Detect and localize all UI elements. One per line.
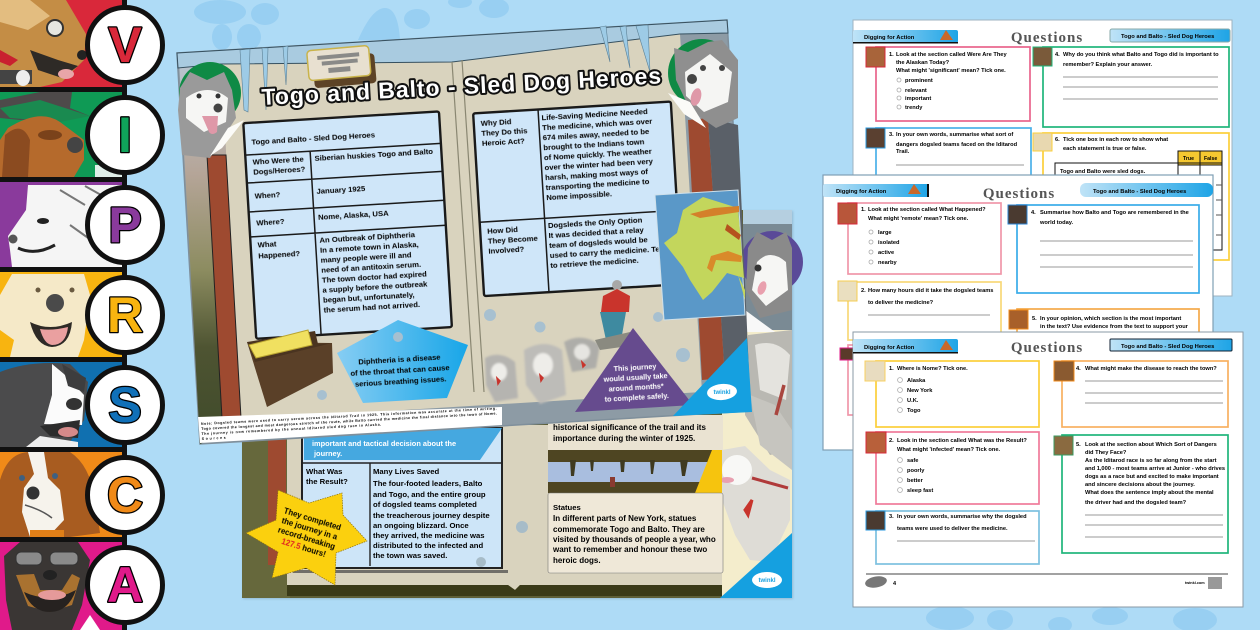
snowflakes [317, 309, 690, 400]
question box 1 pink: relevant [905, 88, 927, 94]
footer: twinkl.com [1185, 581, 1205, 585]
statues text panel: commemorate Togo and Balto. They are [553, 525, 705, 534]
panel: worksheet page C [853, 332, 1243, 607]
right fact table: over the winter had been very [544, 157, 654, 172]
table text: Many Lives Saved [373, 467, 440, 476]
question box 1 yellow [865, 361, 1039, 427]
right fact table: Dogsleds the Only Option [548, 215, 643, 230]
statues text panel: heroic dogs. [553, 556, 601, 565]
callout: yellow star: the journey in a [281, 516, 339, 542]
header tab left [853, 339, 958, 354]
question box blue: In your own words, summarise what sort of [896, 132, 1013, 138]
trail text panel [548, 415, 723, 450]
right fact table: They Become [488, 234, 539, 246]
row A: pink with rottweiler in glasses [0, 542, 122, 630]
panel: back book page [242, 210, 803, 599]
question box yellow with true/false table: False [1204, 156, 1217, 162]
question box blue: dangers dogsled teams faced on the Iditarod [896, 142, 1018, 148]
left fact table: need of an antitoxin serum. [321, 260, 421, 275]
right husky portrait [668, 39, 738, 128]
right fact table: Nome impossible. [546, 189, 612, 202]
question box green [1033, 47, 1229, 127]
letter circle S [88, 368, 162, 442]
question box orange: in the text? Use evidence from the text to support your [1040, 324, 1189, 330]
question box 1 yellow: 1. [889, 366, 894, 372]
question box blue [1008, 205, 1199, 293]
statues text panel: In different parts of New York, statues [553, 514, 697, 523]
heading: Questions [1011, 30, 1083, 46]
left fact table: Happened? [258, 249, 301, 260]
question box blue: world today. [1039, 220, 1073, 226]
question box 3 blue: teams were used to deliver the medicine. [897, 526, 1008, 532]
question box 5 green: Look at the section about Which Sort of Dangers [1085, 442, 1217, 448]
letter circle P [88, 188, 162, 262]
question box 2 pink: poorly [907, 468, 925, 474]
table text: of dogsled teams completed [373, 500, 477, 509]
header tab left: Digging for Action [864, 35, 915, 41]
statues text panel: want to remember and honour these two [552, 545, 707, 554]
question box blue: 4. [1031, 210, 1036, 216]
right fact table: used to carry the medicine. Ted [550, 244, 665, 260]
question box 1 pink: What might 'remote' mean? Tick one. [868, 216, 969, 222]
letter circle R: R [107, 287, 143, 343]
letter circle C [88, 458, 162, 532]
left fact table: An Outbreak of Diphtheria [319, 230, 416, 245]
trail text panel: historical significance of the trail and its [553, 423, 706, 432]
letter circle S: S [108, 377, 142, 433]
question box 1 pink [866, 47, 1030, 121]
row C: orange with spaniel [0, 452, 122, 537]
header tab left: Digging for Action [864, 345, 915, 351]
landscape strip [242, 430, 290, 598]
table text: they arrived, the medicine was [373, 531, 485, 540]
right fact table: transporting the medicine to [545, 177, 650, 192]
right red post [688, 118, 725, 380]
question box 1 pink: large [878, 230, 892, 236]
table text: The four-footed leaders, Balto [373, 479, 483, 488]
panel: worksheet page A [853, 20, 1232, 296]
left fact table: Dogs/Heroes? [253, 165, 306, 177]
question box 4 orange: What might make the disease to reach the town? [1085, 366, 1217, 372]
table text: the treacherous journey despite [373, 511, 490, 520]
question box yellow with true/false table: each statement is true or false. [1063, 146, 1147, 152]
twinkl corner badge [673, 338, 752, 416]
row I: green with bloodhound in hat [0, 92, 122, 177]
table text [306, 467, 490, 560]
sled dog team and musher [485, 280, 636, 404]
left fact table: When? [254, 190, 281, 201]
question box 1 yellow: Where is Nome? Tick one. [897, 366, 968, 372]
question box 5 green: As the Iditarod race is so far along from the start [1085, 458, 1217, 464]
question box 3 blue [866, 511, 1039, 564]
book pages [287, 425, 730, 590]
left fact table: Nome, Alaska, USA [318, 209, 389, 222]
header tab right: Togo and Balto - Sled Dog Heroes [1121, 34, 1214, 40]
question box yellow: to deliver the medicine? [868, 300, 934, 306]
question box yellow with true/false table [1033, 133, 1229, 260]
question box yellow: 2. [861, 288, 866, 294]
statues text panel [548, 493, 723, 573]
letter circle A [88, 548, 162, 622]
question box yellow with true/false table: Togo and Balto were sled dogs. [1060, 169, 1146, 175]
question box 1 pink [838, 203, 1001, 274]
musher [612, 280, 622, 290]
question box 1 pink: important [905, 96, 931, 102]
question box 1 pink: What might 'significant' mean? Tick one. [896, 68, 1006, 74]
question box 3 blue: In your own words, summarise why the dogsled [897, 514, 1027, 520]
header tab left [853, 30, 958, 44]
question box yellow [838, 281, 1001, 340]
right fact table: They Do this [481, 126, 528, 138]
question box 1 pink: active [878, 250, 894, 256]
left fact table: the serum had not arrived. [323, 300, 420, 315]
question box 5 green: and sincere decisions about the journey. [1085, 482, 1195, 488]
twinkl corner badge: twinkl [758, 578, 776, 584]
right fact table: team of dogsleds would be [549, 235, 649, 250]
header tab right: Togo and Balto - Sled Dog Heroes [1121, 344, 1214, 350]
question box orange [1009, 309, 1199, 344]
question box 1 pink: Look at the section called What Happened? [868, 207, 986, 213]
right fact table: The medicine, which was over [542, 117, 652, 132]
header tab right [1110, 339, 1232, 351]
heading: Questions [983, 186, 1055, 202]
header tab left [823, 184, 929, 197]
left fact table: Togo and Balto - Sled Dog Heroes [251, 130, 375, 147]
letter circle C: C [107, 467, 143, 523]
question box 1 pink: nearby [878, 260, 897, 266]
callout: purple triangle: to complete safely. [604, 391, 669, 404]
question box 1 yellow: Togo [907, 408, 921, 414]
statues text panel: Statues [553, 503, 581, 512]
callout: purple triangle: would usually take [602, 371, 668, 384]
right fact table: Heroic Act? [482, 136, 525, 148]
question box 5 green: What does the sentence imply about the mental [1085, 490, 1214, 496]
statues text panel: visited by thousands of people a year, who [553, 535, 716, 544]
row P: purple with white dog [0, 182, 122, 267]
right fact table: Life-Saving Medicine Needed [541, 107, 648, 122]
right fact table: harsh, making most ways of [545, 167, 649, 182]
header banner in table [293, 428, 508, 573]
trail text panel: importance during the winter of 1925. [553, 434, 695, 443]
left fact table: What [257, 239, 277, 250]
question box 1 yellow: Alaska [907, 378, 926, 384]
left red post [207, 155, 241, 418]
footnote strip: Sources [202, 436, 226, 441]
footer: 4 [893, 581, 897, 587]
question box orange: In your opinion, which section is the most important [1040, 316, 1181, 322]
right fact table: brought to the Indians town [543, 137, 645, 152]
left fact table: began but, unfortunately, [323, 290, 415, 305]
question box 2 pink: better [907, 478, 924, 484]
twinkl corner badge [720, 533, 792, 598]
question box 1 pink: prominent [905, 78, 933, 84]
question box yellow with true/false table: Tick one box in each row to show what [1063, 137, 1168, 143]
book pages background [222, 34, 702, 420]
twinkl corner badge: twinkl [713, 390, 731, 396]
table text: and Togo, and the entire group [373, 490, 486, 499]
table text: the town was saved. [373, 551, 447, 560]
footnote strip [198, 407, 502, 443]
question box 2 pink [866, 432, 1039, 504]
left fact table: Siberian huskies Togo and Balto [314, 147, 434, 163]
letter circle V: V [108, 17, 142, 73]
question box blue: 3. [889, 132, 894, 138]
callout: yellow star: 127.5 hours! [280, 537, 327, 559]
row V: red with terrier [0, 0, 122, 87]
panel: VIPERS dog strip [0, 0, 162, 630]
right fact table: Involved? [488, 245, 525, 256]
question box 1 pink: 1. [889, 52, 894, 58]
question box 2 pink: Look in the section called What was the Result? [897, 438, 1027, 444]
question box 2 pink: safe [907, 458, 918, 464]
question box 5 green: did They Face? [1085, 450, 1127, 456]
question box 1 pink: the Alaskan Today? [896, 60, 950, 66]
question box yellow: How many hours did it take the dogsled teams [868, 288, 993, 294]
question box 1 pink: isolated [878, 240, 900, 246]
row S: blue with collie [0, 362, 122, 447]
right fact table [473, 102, 682, 296]
question box 5 green: 5. [1076, 442, 1081, 448]
question box green: remember? Explain your answer. [1063, 62, 1153, 68]
question box 1 yellow: U.K. [907, 398, 919, 404]
question box 5 green: dogs as a race but and excited to make important [1085, 474, 1219, 480]
letter circle R [88, 278, 162, 352]
table text: the Result? [306, 477, 348, 486]
top right husky with purple ring [741, 210, 803, 332]
header banner in table: important and tactical decision about the [312, 439, 456, 448]
callout: purple triangle [575, 328, 693, 412]
right fact table: 674 miles away, needed to be [542, 127, 650, 142]
gutter lines [452, 60, 484, 392]
letter circle V [88, 8, 162, 82]
fact tables, page-aligned [243, 98, 683, 339]
letter circle I [88, 98, 162, 172]
footnote strip: Togo covered the longest and most dangerous stretch of the route, while Balto carried the medicine the final distance into the town of Nome. [201, 412, 497, 431]
callout: purple triangle: This journey [613, 362, 657, 373]
book plaque [307, 45, 377, 89]
callout: yellow star: They completed [283, 506, 342, 532]
question box 5 green: the driver had and the dogsled team? [1085, 500, 1187, 506]
callout: diphtheria pentagon: of the throat that can cause [350, 363, 450, 378]
question box 1 pink: 1. [861, 207, 866, 213]
question box 1 pink: trendy [905, 105, 923, 111]
question box green: 4. [1055, 52, 1060, 58]
letter circle P: P [108, 197, 142, 253]
footnote strip: The journey is now remembered by the annual Iditarod sled dog race in Alaska. [201, 423, 381, 436]
right fact table: of Nome quickly. The weather [544, 147, 652, 162]
callout: diphtheria pentagon: serious breathing issues. [355, 374, 447, 389]
question box 2 pink: sleep fast [907, 488, 933, 494]
right fact table: How Did [487, 225, 518, 236]
letter circle A: A [107, 557, 143, 613]
red post [268, 430, 286, 565]
question box blue: Trail. [896, 149, 910, 155]
question box 4 orange: 4. [1076, 366, 1081, 372]
left husky portrait [178, 62, 244, 158]
left fact table: In a remote town in Alaska, [320, 240, 419, 255]
footnote strip: Note: Dogsled teams were used to carry serum across the Iditarod Trail in 1925. This information was accurate at the time of writing. [201, 407, 497, 426]
question box 4 orange [1054, 361, 1228, 427]
row dividers and spine [0, 90, 122, 540]
question box blue: Summarise how Balto and Togo are remembered in the [1040, 210, 1189, 216]
header tab right [1110, 29, 1230, 42]
left fact table: The town doctor had expired [322, 269, 427, 285]
header tab left: Digging for Action [836, 189, 887, 195]
results table [302, 428, 502, 568]
left fact table: a supply before the outbreak [322, 279, 428, 295]
snowflakes on back page [476, 521, 528, 567]
map of Alaska [655, 190, 745, 320]
left fact table: many people were ill and [320, 250, 412, 265]
icon: treasure chest [247, 330, 333, 407]
letter circle I: I [118, 107, 132, 163]
question box 3 blue: 3. [889, 514, 894, 520]
question box yellow with true/false table: True [1183, 156, 1194, 162]
right fact table: It was decided that a relay [548, 225, 645, 240]
right fact table: Why Did [480, 117, 512, 128]
table text: distributed to the infected and [373, 541, 483, 550]
table text: an ongoing blizzard. Once [373, 521, 469, 530]
callout: diphtheria pentagon [337, 320, 468, 403]
left fact table: January 1925 [316, 184, 366, 196]
header banner in table: journey. [313, 449, 342, 458]
left fact table [243, 111, 452, 339]
header tab right [1080, 183, 1213, 197]
question box orange: 5. [1032, 316, 1037, 322]
photo of statue setting [548, 450, 722, 493]
heading: Questions [1011, 340, 1083, 356]
callout: yellow star [246, 490, 367, 585]
landscape left edge [179, 58, 245, 444]
row R: yellow with golden retriever [0, 272, 122, 357]
question box 2 pink: 2. [889, 438, 894, 444]
question box 2 pink: What might 'infected' mean? Tick one. [897, 447, 1001, 453]
callout: diphtheria pentagon: Diphtheria is a disease [358, 353, 441, 366]
lower left pink box fragment [840, 345, 858, 415]
question box blue [866, 128, 1031, 188]
question box 5 green [1054, 435, 1228, 553]
footer [864, 574, 1228, 589]
question box yellow with true/false table: 6. [1055, 137, 1060, 143]
question box 5 green: and 1,000 - most teams arrive at Junior - who drives [1085, 466, 1225, 472]
header tab right: Togo and Balto - Sled Dog Heroes [1093, 189, 1186, 195]
callout: purple triangle: around months* [608, 381, 664, 394]
title: Togo and Balto - Sled Dog Heroes [261, 62, 662, 110]
sled dogs [485, 338, 600, 404]
right dog panel [720, 330, 792, 598]
callout: yellow star: record-breaking [277, 525, 336, 551]
question box green: Why do you think what Balto and Togo did is important to [1063, 52, 1219, 58]
question box 1 pink: Look at the section called Were Are They [896, 52, 1007, 58]
icy top band [177, 20, 728, 68]
right fact table: to retrieve the medicine. [550, 256, 639, 270]
panel: front book page [177, 20, 752, 444]
icicles [240, 25, 650, 112]
left fact table: Where? [256, 217, 285, 228]
left fact table: Who Were the [252, 155, 305, 167]
panel: worksheet page B [823, 175, 1213, 450]
table text: What Was [306, 467, 342, 476]
question box 1 yellow: New York [907, 388, 933, 394]
